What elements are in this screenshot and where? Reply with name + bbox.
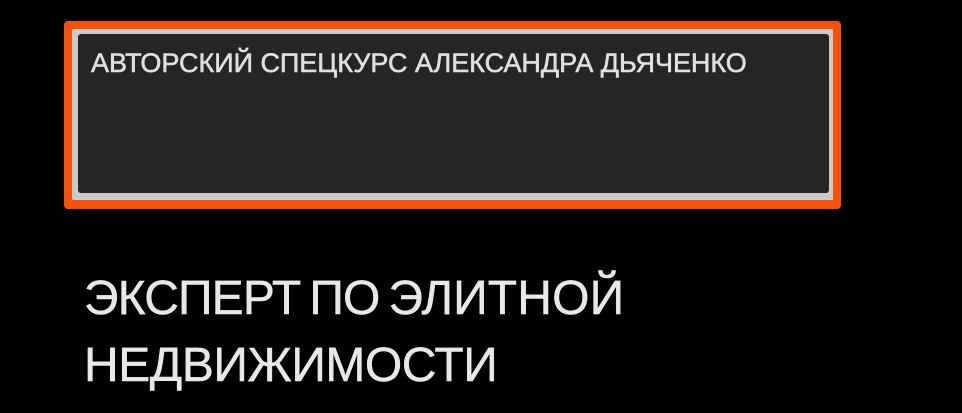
heading: НЕДВИЖИМОСТИ (84, 339, 497, 392)
heading (84, 270, 624, 392)
banner dark panel (78, 34, 829, 193)
panel: course banner (64, 21, 841, 209)
banner inner frame (72, 29, 833, 200)
banner text: АВТОРСКИЙ СПЕЦКУРС АЛЕКСАНДРА ДЬЯЧЕНКО (91, 48, 747, 78)
heading: ЭКСПЕРТ ПО ЭЛИТНОЙ (84, 272, 624, 325)
